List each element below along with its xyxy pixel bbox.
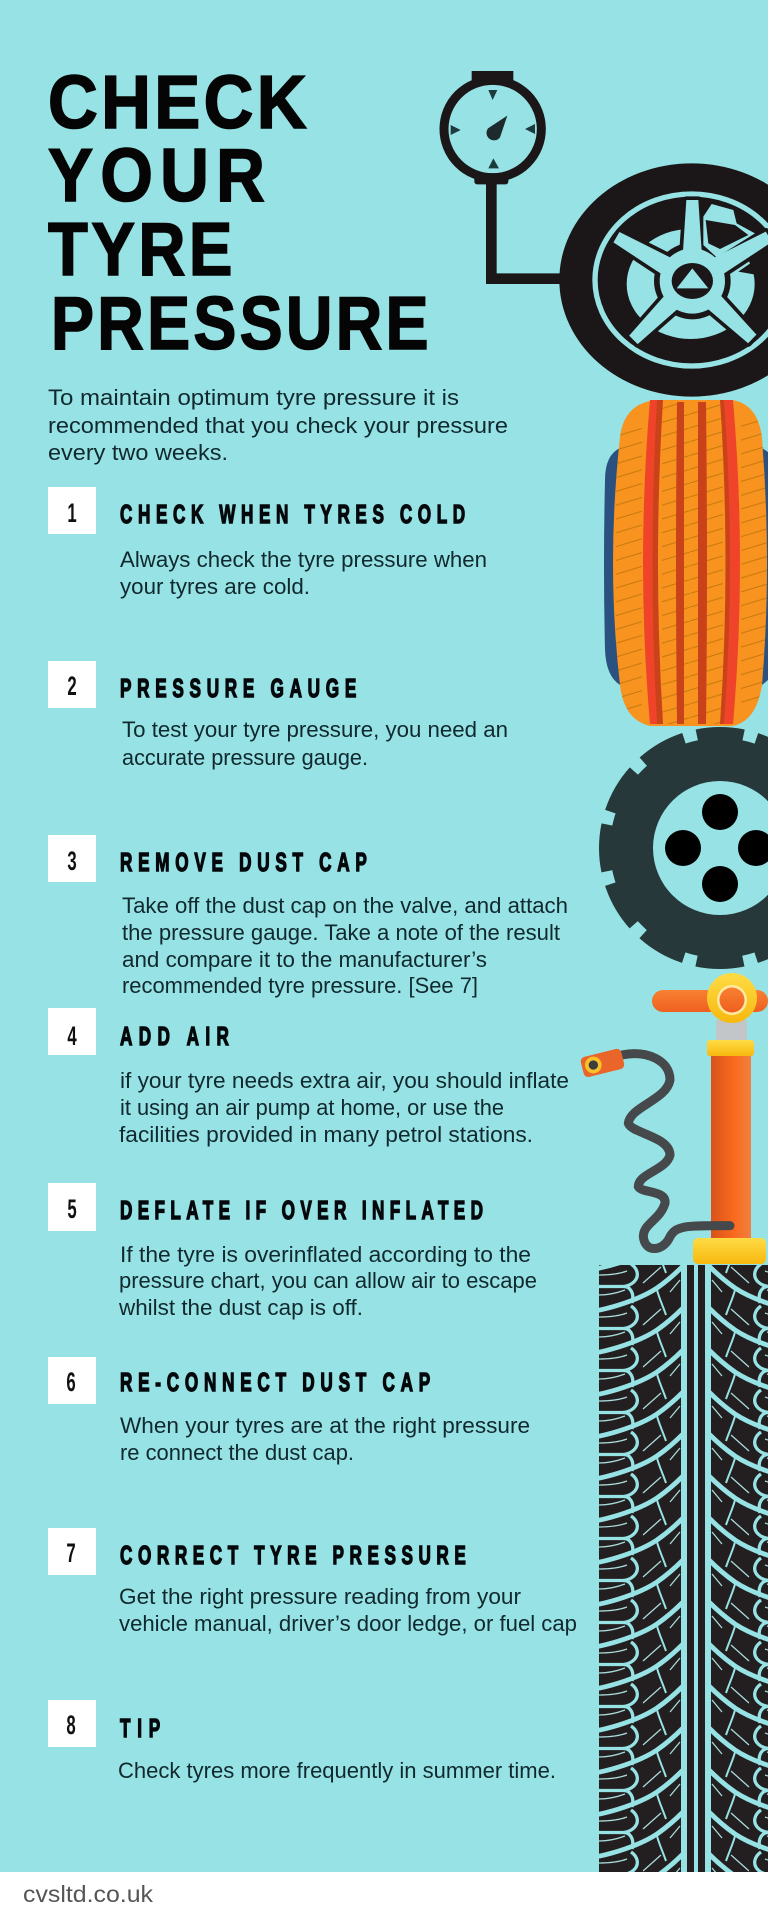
step 7: Get the right pressure reading from your: [119, 1584, 521, 1609]
step 4: 4: [67, 1021, 77, 1051]
step 1: Always check the tyre pressure when: [120, 547, 487, 572]
step 1: your tyres are cold.: [120, 574, 310, 599]
step 3: and compare it to the manufacturer’s: [122, 947, 487, 972]
title: CHECK: [48, 61, 307, 145]
intro text: every two weeks.: [48, 440, 228, 465]
step 1: CHECK WHEN TYRES COLD: [120, 499, 465, 529]
icon: air pump: [580, 973, 768, 1264]
step 5: If the tyre is overinflated according to the: [120, 1242, 531, 1267]
step 5: DEFLATE IF OVER INFLATED: [120, 1195, 483, 1225]
step 1: 1: [67, 498, 77, 528]
step 3: REMOVE DUST CAP: [120, 847, 367, 877]
step 5: pressure chart, you can allow air to escape: [119, 1268, 537, 1293]
step 7: 7: [66, 1538, 76, 1568]
step 7: CORRECT TYRE PRESSURE: [120, 1540, 466, 1570]
step 5: [48, 1183, 537, 1320]
intro text: To maintain optimum tyre pressure it is: [48, 385, 459, 410]
step 3: Take off the dust cap on the valve, and attach: [122, 893, 568, 918]
step 6: RE-CONNECT DUST CAP: [120, 1367, 430, 1397]
step 7: vehicle manual, driver’s door ledge, or fuel cap: [119, 1611, 577, 1636]
step 3: [48, 835, 568, 998]
tyre tread pattern: [599, 1265, 768, 1872]
title: YOUR: [48, 134, 265, 218]
icon: alloy wheel: [559, 163, 768, 397]
step 2: accurate pressure gauge.: [122, 745, 368, 770]
step 4: it using an air pump at home, or use the: [120, 1095, 504, 1120]
step 8: Check tyres more frequently in summer time.: [118, 1758, 556, 1783]
step 5: whilst the dust cap is off.: [118, 1295, 363, 1320]
step 3: 3: [67, 846, 77, 876]
step 2: [48, 661, 508, 770]
step 8: TIP: [120, 1713, 160, 1743]
step 4: if your tyre needs extra air, you should inflate: [120, 1068, 569, 1093]
step 8: 8: [66, 1710, 76, 1740]
step 3: the pressure gauge. Take a note of the result: [122, 920, 561, 945]
icon: orange tyre tread: [604, 400, 768, 726]
step 7: [48, 1528, 577, 1636]
step 2: 2: [67, 671, 77, 701]
footer bar: cvsltd.co.uk: [23, 1881, 154, 1907]
step 1: [48, 487, 487, 599]
intro text: recommended that you check your pressure: [48, 413, 508, 438]
step 2: To test your tyre pressure, you need an: [122, 717, 508, 742]
title: PRESSURE: [51, 281, 429, 365]
step 2: PRESSURE GAUGE: [120, 673, 356, 703]
step 6: [48, 1357, 530, 1465]
step 4: [48, 1008, 569, 1147]
step 6: re connect the dust cap.: [120, 1440, 354, 1465]
step 6: 6: [66, 1367, 76, 1397]
intro text: [48, 385, 508, 465]
title: TYRE: [48, 207, 232, 291]
step 4: ADD AIR: [120, 1021, 229, 1051]
footer bar: [0, 1872, 768, 1920]
title: [48, 61, 429, 365]
icon: dark tyre with wheel: [605, 733, 768, 963]
step 4: facilities provided in many petrol stations.: [119, 1122, 533, 1147]
step 3: recommended tyre pressure. [See 7]: [122, 973, 478, 998]
step 6: When your tyres are at the right pressure: [120, 1413, 530, 1438]
step 5: 5: [67, 1194, 77, 1224]
step 8: [48, 1700, 556, 1783]
icon: pressure gauge: [444, 71, 563, 279]
